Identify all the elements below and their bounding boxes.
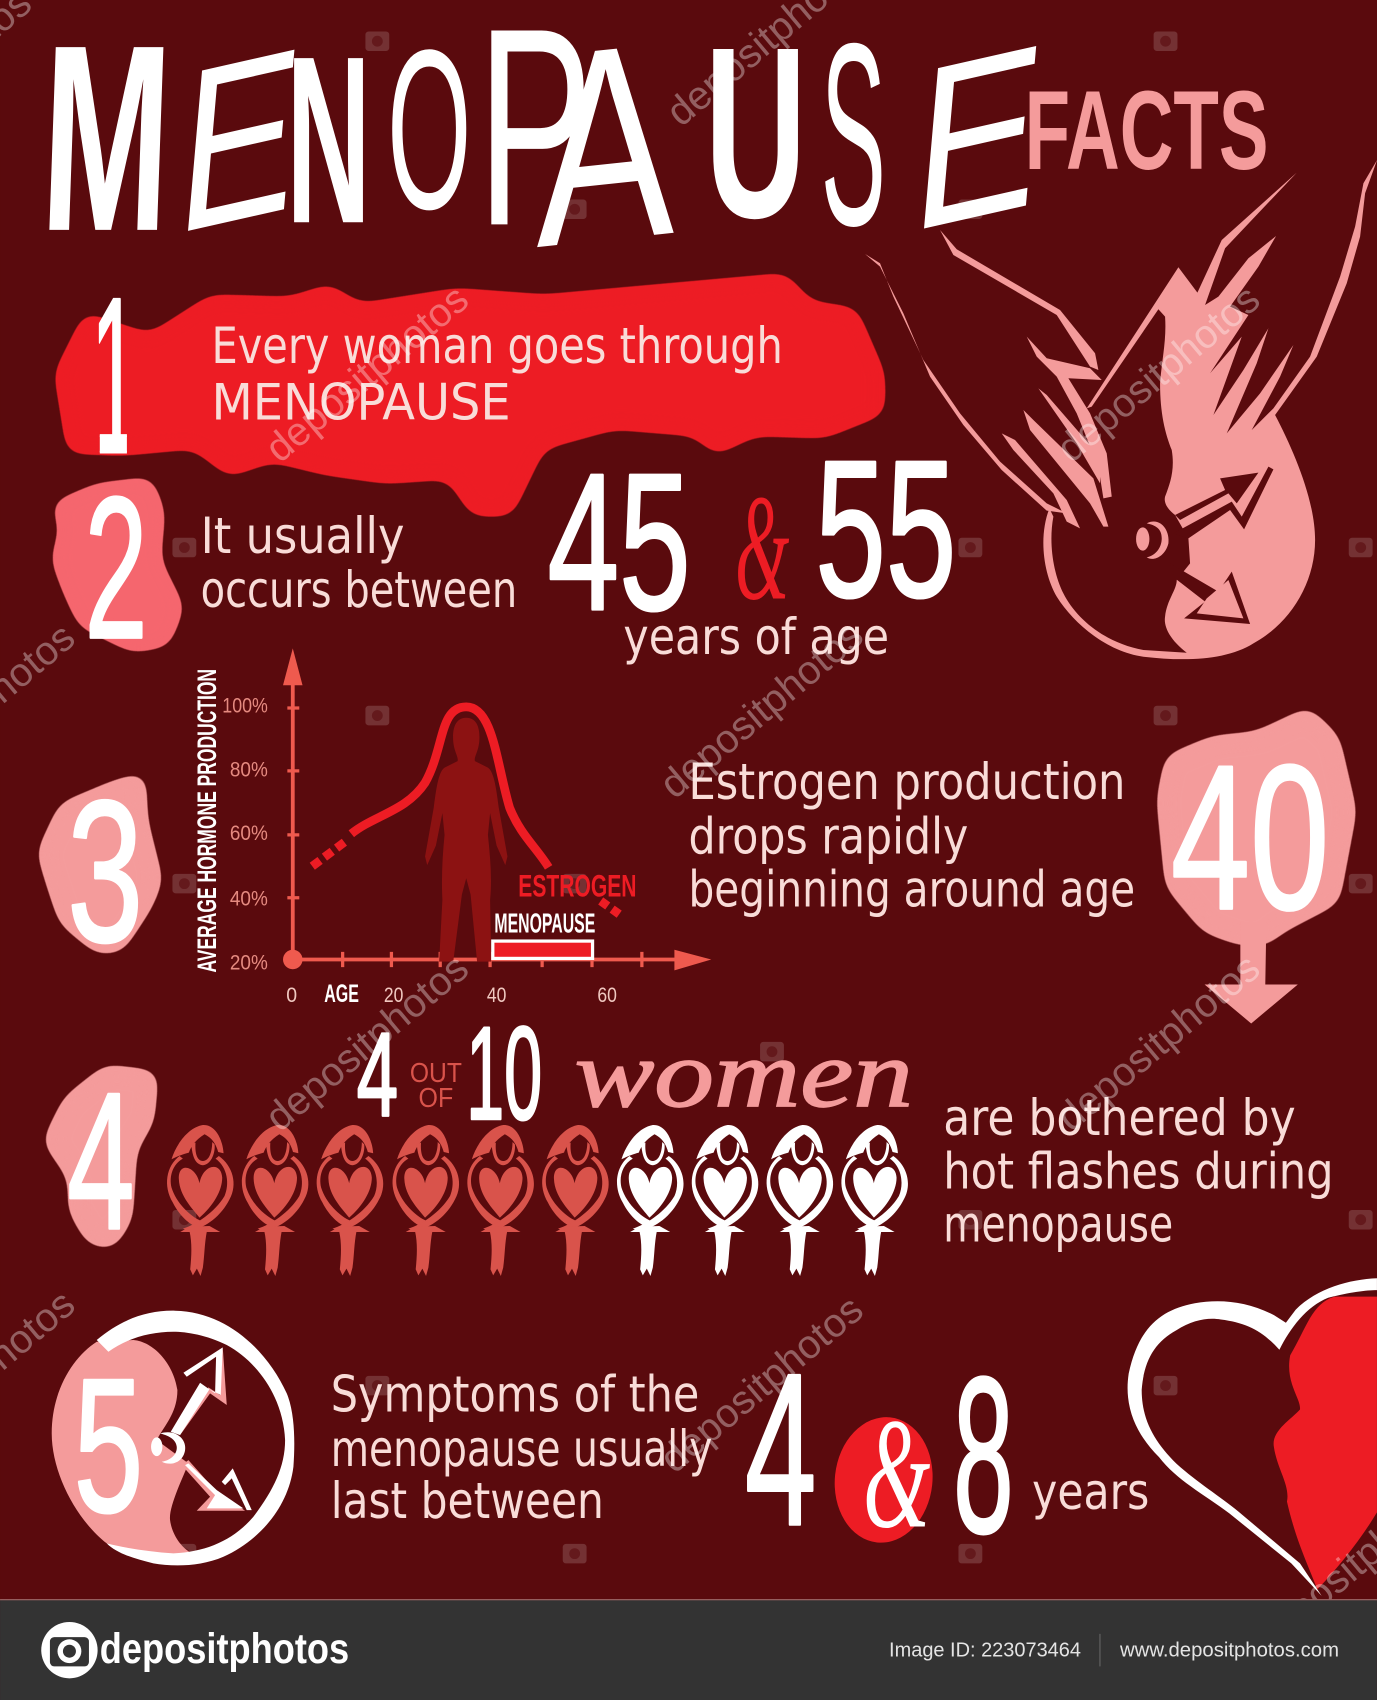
fact 2: age 55: 55	[815, 420, 956, 638]
chart: y axis labels	[222, 692, 268, 974]
watermarks: depositphotos	[652, 613, 872, 807]
chart: x axis labels: AGE	[324, 980, 359, 1008]
fact 4: number: 4	[67, 1052, 134, 1270]
chart: y axis title: AVERAGE HORMONE PRODUCTION	[191, 669, 222, 973]
clock: hands	[151, 1347, 252, 1511]
clock: upper sweep	[940, 230, 1098, 370]
fact 3: age 40 blob with down arrow	[1157, 707, 1356, 1023]
heart illustration	[1128, 1278, 1377, 1596]
fact 3: text	[688, 753, 1135, 918]
fact 3: text: Estrogen production	[688, 753, 1125, 811]
fact 4: text: menopause	[943, 1195, 1173, 1253]
fact 4: text: are bothered by	[943, 1089, 1296, 1147]
fact 5: text	[331, 1366, 712, 1530]
infographic canvas: &	[735, 463, 789, 631]
fact 4: blob	[42, 1065, 158, 1249]
fact 4: 4 out of 10: OF	[419, 1081, 453, 1113]
chart: axes	[283, 648, 711, 970]
chart: x axis labels: 40	[487, 982, 506, 1007]
watermarks: depositphotos	[652, 1287, 872, 1481]
fact 5: text: Symptoms of the	[331, 1366, 699, 1424]
clock: up hand	[1173, 467, 1273, 538]
fact 1: text: MENOPAUSE	[211, 374, 511, 432]
clock: main body with spikes and sweep	[1043, 160, 1377, 659]
fact 2: years of age: years of age	[623, 608, 889, 666]
chart: x axis labels: 0	[286, 982, 297, 1007]
chart: estrogen curve	[312, 707, 623, 917]
clock: hub	[1136, 522, 1169, 559]
chart: y axis labels: 40%	[230, 885, 268, 910]
fact 4: 4 out of 10: 4	[357, 1009, 398, 1142]
chart: x axis labels: 20	[384, 982, 403, 1007]
fact 5: ampersand: &	[863, 1387, 930, 1562]
infographic canvas: 8	[953, 1332, 1014, 1580]
watermarks: depositphotos	[1049, 946, 1268, 1140]
chart: menopause bracket	[493, 941, 593, 958]
fact 2: blob	[51, 477, 184, 653]
clock: down hand	[1170, 563, 1250, 624]
title: MENOPAUSE: E	[904, 0, 1052, 282]
fact 5: clock	[52, 1311, 294, 1565]
title: MENOPAUSE: E	[169, 0, 310, 284]
fact 4: 4 out of 10: OUT	[410, 1056, 462, 1088]
clock: face, ring and hands	[52, 1311, 294, 1565]
fact 1: red blob	[54, 273, 885, 516]
watermark camera icons	[172, 31, 1373, 1563]
clock: fringe strips	[1038, 388, 1100, 483]
chart: menopause label: MENOPAUSE	[494, 906, 595, 938]
fact 1: text: Every woman goes through	[211, 317, 783, 375]
fact 5: number 4: 4	[745, 1328, 816, 1570]
fact 3: blob	[37, 772, 163, 954]
clock: crescent strip	[1027, 337, 1112, 498]
watermarks: depositphotos	[1049, 277, 1268, 471]
infographic canvas: 1	[91, 252, 139, 500]
title: MENOPAUSE: N	[286, 6, 371, 273]
fact 4: women: women	[575, 1021, 913, 1127]
chart: y axis labels: 60%	[230, 820, 268, 845]
chart: x axis labels: 60	[597, 982, 617, 1007]
fact 3: text: drops rapidly	[688, 807, 968, 865]
clock illustration, top right	[865, 160, 1377, 659]
icons: six coloured women	[167, 1125, 609, 1276]
fact 5: red ellipse	[829, 1412, 939, 1548]
fact 2: text	[201, 507, 517, 619]
watermarks: depositphotos	[257, 946, 477, 1140]
fact 3: text: beginning around age	[688, 860, 1135, 918]
fact 4: 4 out of 10: 10	[466, 1000, 542, 1148]
title: MENOPAUSE	[37, 0, 1052, 306]
fact 2: text: It usually	[201, 507, 404, 565]
chart: estrogen label: ESTROGEN	[518, 869, 636, 904]
footer: image id: Image ID: 223073464	[889, 1639, 1081, 1662]
chart: x axis labels	[286, 980, 617, 1008]
fact 2: number: 2	[85, 454, 147, 680]
fact 5: text: last between	[331, 1472, 604, 1530]
clock: pink crescent	[52, 1340, 192, 1555]
chart: woman silhouette	[425, 718, 507, 962]
footer: camera logo	[41, 1622, 98, 1678]
title: MENOPAUSE: O	[387, 3, 471, 257]
fact 1: text	[211, 317, 783, 432]
clock: white ring	[97, 1311, 294, 1565]
chart: y axis labels: 80%	[230, 756, 268, 781]
fact 2: age 45: 45	[548, 433, 691, 651]
hormone chart	[191, 648, 711, 1008]
chart: y axis labels: 20%	[230, 949, 268, 974]
footer: brand name: depositphotos	[100, 1625, 349, 1672]
icons: four white women	[617, 1125, 908, 1276]
fact 3: number: 3	[67, 758, 143, 984]
clock: long left sweep	[865, 254, 1067, 513]
heart: red half	[1274, 1297, 1377, 1589]
title: MENOPAUSE: U	[705, 0, 807, 269]
footer: website: www.depositphotos.com	[1119, 1639, 1339, 1662]
footer bar	[0, 1599, 1377, 1700]
fact 5: years: years	[1032, 1463, 1149, 1521]
fact 2: text: occurs between	[201, 561, 517, 619]
heart: white outline	[1128, 1278, 1377, 1596]
fact 4: 4 out of 10	[357, 1000, 542, 1148]
watermarks: depositphotos	[257, 277, 477, 471]
fact 5: text: menopause usually	[331, 1420, 712, 1478]
fact 4: text	[943, 1089, 1334, 1253]
chart: y axis labels: 100%	[222, 692, 268, 717]
clock: number 5: 5	[74, 1339, 143, 1552]
